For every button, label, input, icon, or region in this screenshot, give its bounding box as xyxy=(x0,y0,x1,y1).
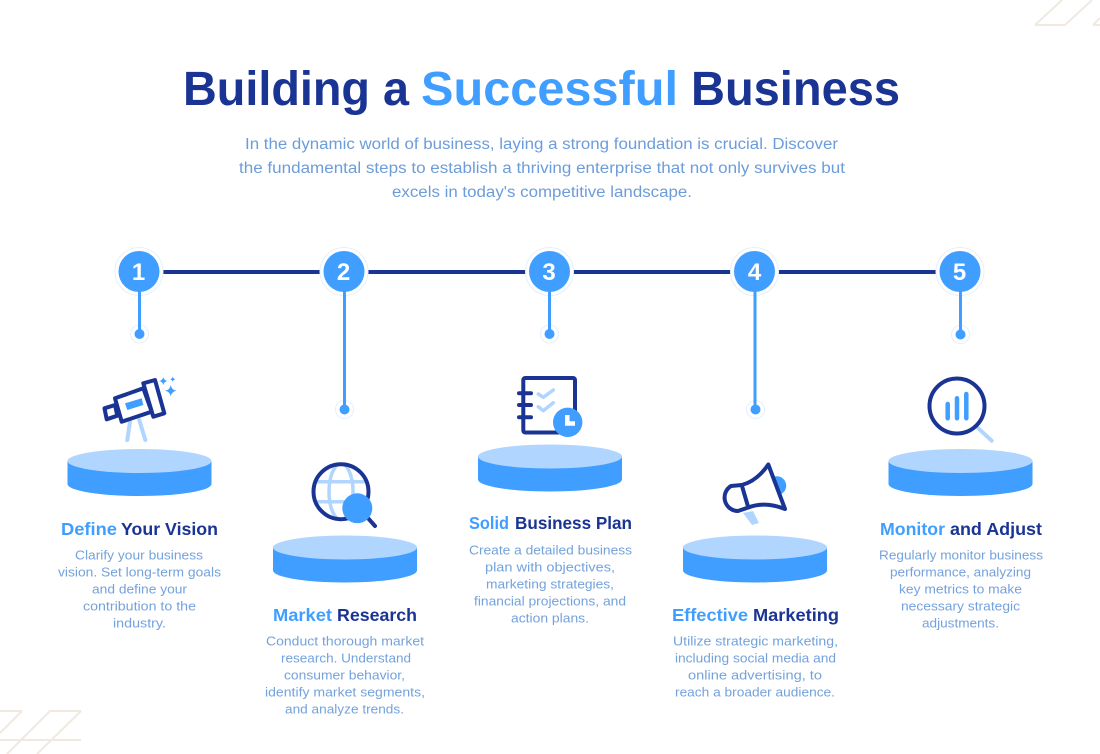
heading xyxy=(273,605,417,625)
description: action plans. xyxy=(511,610,589,626)
description: adjustments. xyxy=(922,616,999,630)
step 5 marker xyxy=(936,248,984,344)
title xyxy=(183,63,900,116)
icon: notebook with clock xyxy=(519,378,582,437)
platform disc xyxy=(888,449,1032,496)
description: Utilize strategic marketing, xyxy=(673,634,838,648)
icon: megaphone xyxy=(725,464,786,525)
description: and analyze trends. xyxy=(285,702,404,716)
step 3 marker xyxy=(526,248,574,343)
description xyxy=(58,548,222,630)
description: financial projections, and xyxy=(474,594,626,608)
subtitle text: In the dynamic world of business, laying a strong foundation is crucial. Discover xyxy=(245,136,838,153)
description: vision. Set long-term goals xyxy=(58,564,222,580)
platform disc xyxy=(273,536,417,582)
step 1 marker: 1 xyxy=(132,259,145,286)
subtitle text: the fundamental steps to establish a thriving enterprise that not only survives but xyxy=(239,160,846,177)
description: and define your xyxy=(92,582,188,596)
description: necessary strategic xyxy=(901,598,1021,614)
heading xyxy=(672,605,839,625)
description: identify market segments, xyxy=(265,684,425,700)
description: Regularly monitor business xyxy=(879,548,1044,562)
description xyxy=(265,634,425,716)
description: performance, analyzing xyxy=(890,564,1031,580)
platform disc xyxy=(683,536,827,582)
heading xyxy=(880,519,1042,539)
panel: market research xyxy=(265,464,425,716)
heading xyxy=(61,519,218,539)
description: reach a broader audience. xyxy=(675,684,835,700)
timeline connector xyxy=(140,270,960,274)
heading: Marketing xyxy=(753,605,839,625)
step 3 marker: 3 xyxy=(542,259,556,286)
panel: monitor and adjust xyxy=(879,378,1044,630)
heading: Monitor xyxy=(880,519,945,539)
step 5 marker: 5 xyxy=(953,259,966,286)
step 1 marker xyxy=(115,248,163,343)
step 2 marker xyxy=(320,248,368,418)
step 4 marker xyxy=(730,248,778,418)
heading: Research xyxy=(337,605,417,625)
subtitle text xyxy=(239,136,846,201)
subtitle text: excels in today's competitive landscape. xyxy=(392,184,692,201)
heading: Business Plan xyxy=(515,513,632,533)
icon: globe with magnifier xyxy=(312,464,375,526)
description: contribution to the xyxy=(83,598,196,614)
description: consumer behavior, xyxy=(284,668,405,682)
platform disc xyxy=(68,449,212,496)
title: Successful xyxy=(421,63,678,116)
title: Building a xyxy=(183,63,409,116)
description: marketing strategies, xyxy=(486,576,614,592)
icon: telescope xyxy=(104,376,176,440)
description: Clarify your business xyxy=(75,548,204,562)
icon: magnifier with bars xyxy=(930,378,992,441)
heading: Effective xyxy=(672,605,748,625)
description: Create a detailed business xyxy=(469,542,633,558)
description: online advertising, to xyxy=(688,668,822,682)
description: industry. xyxy=(113,616,166,630)
heading: Your Vision xyxy=(121,519,218,539)
description: research. Understand xyxy=(281,650,411,666)
description: Conduct thorough market xyxy=(266,634,424,648)
heading: Market xyxy=(273,605,332,625)
description xyxy=(673,634,838,700)
panel: effective marketing xyxy=(672,464,839,700)
step 2 marker: 2 xyxy=(337,259,350,286)
heading: and Adjust xyxy=(950,519,1042,539)
description: plan with objectives, xyxy=(485,560,615,574)
panel: solid business plan xyxy=(469,378,633,626)
panel: define your vision xyxy=(58,376,222,630)
description: including social media and xyxy=(675,650,836,666)
platform disc xyxy=(478,444,622,492)
step 4 marker: 4 xyxy=(748,259,762,286)
description: key metrics to make xyxy=(899,582,1022,596)
description xyxy=(469,542,633,626)
description xyxy=(879,548,1044,630)
title: Business xyxy=(691,63,900,116)
heading: Solid xyxy=(469,513,509,533)
heading: Define xyxy=(61,519,117,539)
